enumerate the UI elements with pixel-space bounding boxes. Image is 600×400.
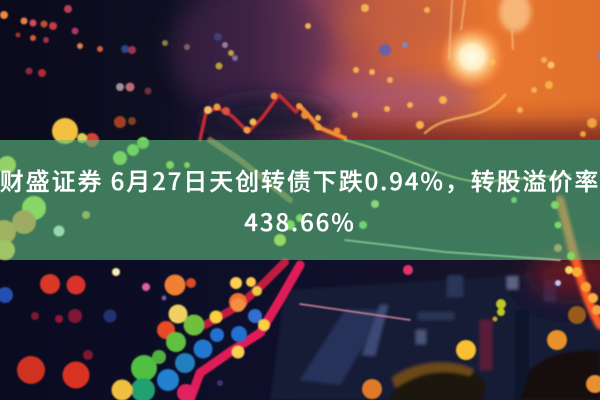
bokeh lights: upper left bbox=[0, 5, 234, 128]
small lights in orange sky bbox=[222, 4, 600, 129]
bokeh lights: lower left cluster bbox=[0, 268, 270, 400]
orange sun flare bbox=[438, 0, 531, 91]
bokeh lights: along chart line and under band bbox=[0, 59, 597, 260]
green title band bbox=[0, 140, 600, 260]
rising line chart trace bbox=[190, 95, 600, 400]
city blocks in lower right bbox=[270, 253, 600, 400]
bokeh lights: lower right bbox=[362, 265, 600, 399]
headline text: 财盛证券 6月27日天创转债下跌0.94%，转股溢价率438.66% bbox=[0, 162, 600, 238]
